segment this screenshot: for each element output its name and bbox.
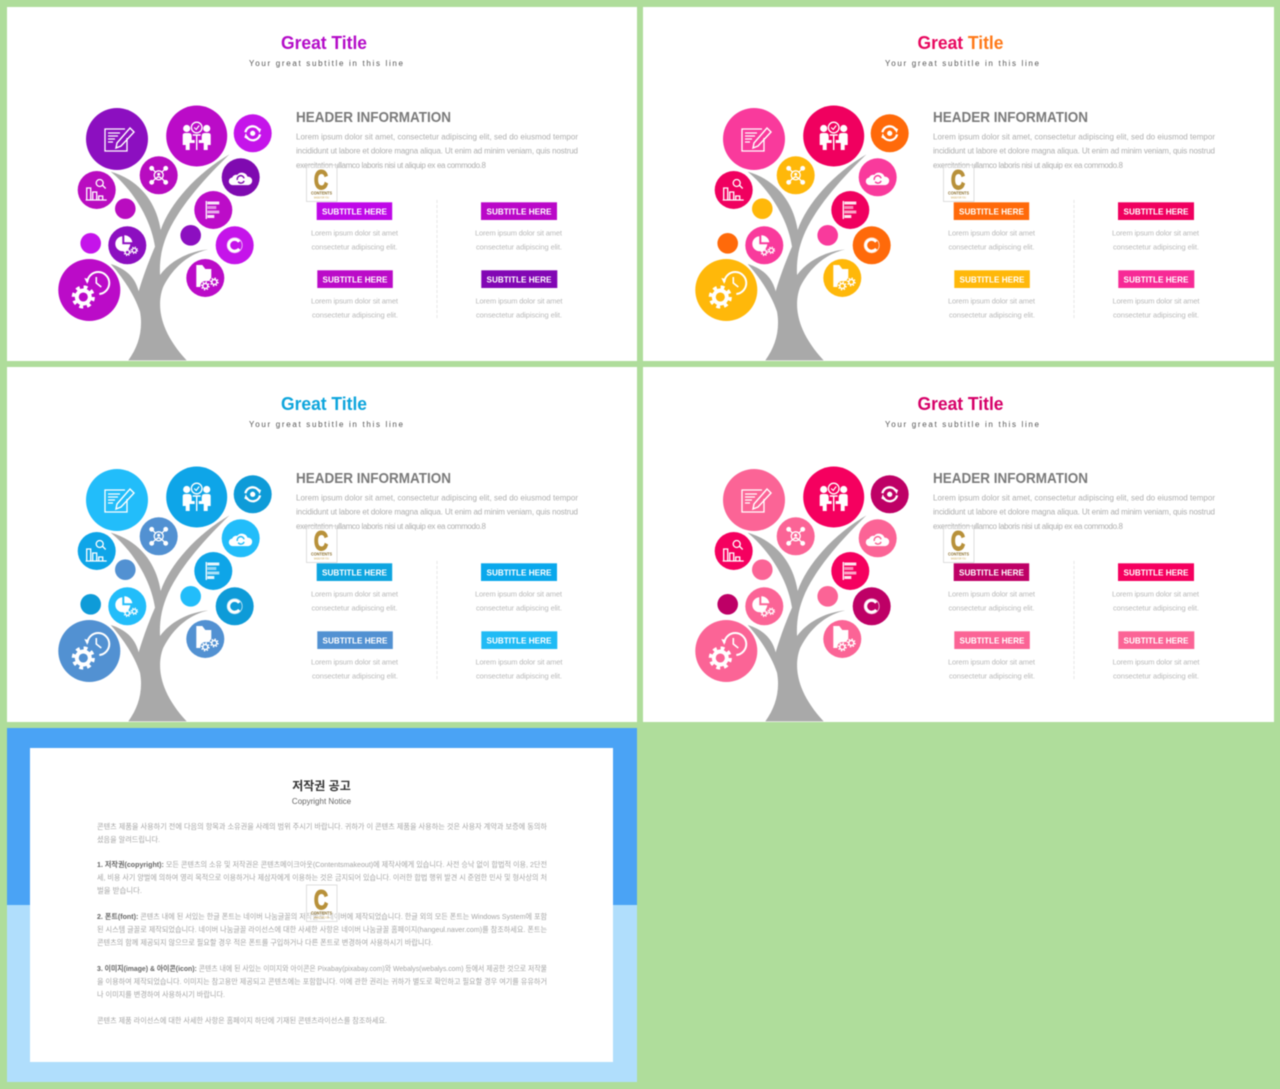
icon: rotate bbox=[234, 475, 272, 513]
block: bottom left bbox=[311, 631, 399, 680]
block: bottom right bbox=[1112, 631, 1200, 680]
block: top left: SUBTITLE HERE bbox=[322, 206, 387, 216]
block: top right: Lorem ipsum dolor sit amet bbox=[1112, 228, 1200, 238]
panel: rose tree slide bbox=[643, 367, 1274, 722]
block: bottom right bbox=[476, 631, 563, 680]
icon: document bbox=[86, 108, 148, 170]
paragraph bbox=[296, 132, 578, 170]
notice title: 저작권 공고 bbox=[292, 778, 351, 793]
icon: document bbox=[86, 469, 148, 531]
block: top left: SUBTITLE HERE bbox=[959, 568, 1024, 578]
icon: team bbox=[803, 106, 864, 166]
block: top left: consectetur adipiscing elit. bbox=[948, 242, 1034, 252]
block: bottom left: consectetur adipiscing elit. bbox=[949, 672, 1035, 680]
tree icon circles bbox=[695, 106, 909, 321]
icon: network bbox=[140, 517, 178, 555]
block: bottom right: consectetur adipiscing elit. bbox=[476, 310, 562, 320]
paragraph bbox=[933, 132, 1215, 170]
notice intro: 콘텐츠 제품을 사용하기 전에 다음의 항목과 소유권을 사례의 범위 주시기 바랍니다. 귀하가 이 콘텐츠 제품을 사용하는 것은 사용자 계약과 보증에 동의하 bbox=[97, 821, 547, 831]
block: top left: Lorem ipsum dolor sit amet bbox=[948, 590, 1036, 598]
paragraph: Lorem ipsum dolor sit amet, consectetur adipiscing elit, sed do eiusmod tempor bbox=[933, 494, 1215, 502]
icon: pie bbox=[745, 587, 783, 625]
icon: gauge bbox=[853, 587, 891, 625]
icon: pie bbox=[108, 587, 146, 625]
block: bottom left bbox=[948, 270, 1036, 320]
icon: team bbox=[166, 466, 227, 528]
icon: rotate bbox=[871, 114, 909, 152]
notice closing line: 콘텐츠 제품 라이선스에 대한 사세한 사항은 홈페이지 하단에 기재된 콘텐츠라이선스를 참조하세요. bbox=[97, 1015, 387, 1025]
block: bottom right: SUBTITLE HERE bbox=[486, 636, 552, 646]
icon: bars bbox=[194, 191, 232, 229]
notice section 1: 1. 저작권(copyright): 모든 콘텐츠의 소유 및 저작권은 콘텐츠메이크아웃(Contentsmakeout)에 제작사에게 있습니다. 사전 승낙 없이 합법적 이용, 2단전 bbox=[97, 859, 547, 869]
block: bottom left: Lorem ipsum dolor sit amet bbox=[311, 296, 399, 306]
icon: gear clock bbox=[58, 620, 120, 682]
icon: chart search bbox=[715, 532, 753, 570]
small circle bbox=[752, 559, 773, 580]
icon: cloud bbox=[859, 158, 897, 196]
panel: blue tree slide bbox=[7, 367, 637, 722]
block: bottom left: SUBTITLE HERE bbox=[960, 274, 1025, 284]
subtitle: Your great subtitle in this line bbox=[885, 420, 1040, 429]
block: top right: SUBTITLE HERE bbox=[486, 568, 552, 578]
tree trunk bbox=[111, 154, 229, 360]
icon: cloud bbox=[222, 519, 260, 557]
small circle bbox=[717, 594, 738, 615]
paragraph: Lorem ipsum dolor sit amet, consectetur adipiscing elit, sed do eiusmod tempor bbox=[933, 132, 1215, 142]
paragraph: incididunt ut labore et dolore magna aliqua. Ut enim ad minim veniam, quis nostrud bbox=[933, 508, 1215, 516]
icon: network bbox=[777, 517, 815, 555]
small circle bbox=[180, 586, 201, 607]
icon: cloud bbox=[859, 519, 897, 557]
small circle bbox=[817, 586, 838, 607]
paragraph: Lorem ipsum dolor sit amet, consectetur adipiscing elit, sed do eiusmod tempor bbox=[296, 494, 578, 502]
block: bottom left: consectetur adipiscing elit. bbox=[312, 672, 398, 680]
header: HEADER INFORMATION bbox=[933, 470, 1088, 487]
watermark logo bbox=[306, 526, 337, 562]
title: Great Title bbox=[281, 33, 367, 53]
block: bottom left: SUBTITLE HERE bbox=[322, 636, 388, 646]
block: top left: Lorem ipsum dolor sit amet bbox=[311, 590, 399, 598]
title: Great Title bbox=[918, 394, 1004, 414]
block: bottom right: consectetur adipiscing elit. bbox=[476, 672, 562, 680]
icon: bars bbox=[831, 552, 869, 590]
icon: bars bbox=[831, 191, 869, 229]
title: Great Title bbox=[281, 394, 367, 414]
notice section 1 bbox=[97, 859, 547, 895]
watermark logo bbox=[306, 165, 337, 202]
block: bottom left: SUBTITLE HERE bbox=[322, 274, 388, 284]
icon: pie bbox=[745, 226, 783, 264]
block: bottom right: SUBTITLE HERE bbox=[1124, 274, 1189, 284]
title: Great Title bbox=[918, 33, 1004, 53]
subtitle: Your great subtitle in this line bbox=[249, 420, 404, 429]
block: top left: consectetur adipiscing elit. bbox=[312, 604, 398, 612]
block: bottom left: Lorem ipsum dolor sit amet bbox=[311, 658, 399, 666]
watermark logo bbox=[944, 165, 974, 202]
panel: copyright notice bbox=[7, 728, 637, 1082]
notice section 2 bbox=[97, 911, 547, 947]
block: top right: consectetur adipiscing elit. bbox=[476, 242, 562, 252]
small circle bbox=[80, 233, 101, 254]
block: top left: SUBTITLE HERE bbox=[322, 568, 387, 578]
icon: folder bbox=[186, 259, 224, 297]
block: top right bbox=[1112, 563, 1200, 612]
notice section 1: 벌을 받습니다. bbox=[97, 885, 142, 895]
notice section 1: 세, 비용 사기 양벌에 의하여 영리 목적으로 이용하거나 제삼자에게 이용하는 것은 금지되어 있습니다. 이러한 합법 행위 발견 시 준엄한 민사 및 형사상의 처 bbox=[97, 872, 547, 882]
small circle bbox=[752, 198, 773, 219]
header: HEADER INFORMATION bbox=[296, 470, 451, 487]
tree icon circles bbox=[695, 466, 909, 682]
small circle bbox=[717, 233, 738, 254]
notice section 2: 된 시스템 글꼴로 제작되었습니다. 네이버 나눔글꼴 라이선스에 대한 사세한 사항은 네이버 나눔글꼴 홈페이지(hangeul.naver.com)를 참조하세요. 폰트는 bbox=[97, 924, 547, 934]
block: top left: SUBTITLE HERE bbox=[959, 206, 1024, 216]
small circle bbox=[80, 594, 101, 615]
block: top left bbox=[948, 563, 1036, 612]
icon: gauge bbox=[216, 587, 254, 625]
block: top right: Lorem ipsum dolor sit amet bbox=[475, 228, 563, 238]
icon: folder bbox=[186, 620, 224, 658]
icon: rotate bbox=[234, 114, 272, 152]
icon: rotate bbox=[871, 475, 909, 513]
block: bottom left bbox=[948, 631, 1036, 680]
paragraph: exercitation ullamco laboris nisi ut aliquip ex ea commodo.8 bbox=[296, 161, 487, 170]
icon: document bbox=[723, 108, 785, 170]
panel: purple tree slide bbox=[7, 7, 637, 361]
block: top left: Lorem ipsum dolor sit amet bbox=[311, 228, 399, 238]
block: top right bbox=[475, 202, 563, 252]
block: top right: consectetur adipiscing elit. bbox=[476, 604, 562, 612]
block: bottom right: SUBTITLE HERE bbox=[486, 274, 552, 284]
block: bottom right: Lorem ipsum dolor sit amet bbox=[1112, 296, 1200, 306]
small circle bbox=[180, 225, 201, 246]
paragraph: exercitation ullamco laboris nisi ut aliquip ex ea commodo.8 bbox=[933, 161, 1124, 170]
notice section 2: 2. 폰트(font): 콘텐츠 내에 된 서있는 한글 폰트는 네이버 나눔글꼴의 저작물로 네이버에 제작되었습니다. 한글 외의 모든 폰트는 Windows System에 포함 bbox=[97, 911, 547, 921]
block: bottom right: Lorem ipsum dolor sit amet bbox=[476, 658, 563, 666]
block: top left: Lorem ipsum dolor sit amet bbox=[948, 228, 1036, 238]
icon: chart search bbox=[78, 171, 116, 209]
block: bottom left: consectetur adipiscing elit. bbox=[312, 310, 398, 320]
block: bottom right: Lorem ipsum dolor sit amet bbox=[1112, 658, 1200, 666]
block: top right: SUBTITLE HERE bbox=[486, 206, 552, 216]
small circle bbox=[817, 225, 838, 246]
icon: cloud bbox=[222, 158, 260, 196]
subtitle: Your great subtitle in this line bbox=[249, 59, 404, 68]
tree icon circles bbox=[58, 106, 272, 321]
tree icon circles bbox=[58, 466, 272, 682]
icon: folder bbox=[823, 259, 861, 297]
block: top right: Lorem ipsum dolor sit amet bbox=[475, 590, 563, 598]
paragraph: exercitation ullamco laboris nisi ut aliquip ex ea commodo.8 bbox=[296, 522, 487, 531]
block: top left: consectetur adipiscing elit. bbox=[948, 604, 1034, 612]
notice section 3: 3. 이미지(image) & 아이콘(icon): 콘텐츠 내에 된 사있는 이미지와 아이콘은 Pixabay(pixabay.com)와 Webalys(webalys.com) 등에서 제공한 것으로 저작물 bbox=[97, 963, 547, 973]
icon: folder bbox=[823, 620, 861, 658]
tree trunk bbox=[748, 154, 866, 360]
icon: network bbox=[140, 156, 178, 194]
watermark logo bbox=[944, 526, 974, 562]
block: bottom right: Lorem ipsum dolor sit amet bbox=[476, 296, 563, 306]
paragraph: incididunt ut labore et dolore magna aliqua. Ut enim ad minim veniam, quis nostrud bbox=[933, 146, 1215, 156]
header: HEADER INFORMATION bbox=[296, 109, 451, 126]
block: top left: consectetur adipiscing elit. bbox=[312, 242, 398, 252]
block: bottom right bbox=[476, 270, 563, 320]
icon: document bbox=[723, 469, 785, 531]
block: bottom left: SUBTITLE HERE bbox=[960, 636, 1025, 646]
subtitle: Your great subtitle in this line bbox=[885, 59, 1040, 68]
block: top right: consectetur adipiscing elit. bbox=[1113, 604, 1199, 612]
panel: pink orange tree slide bbox=[643, 7, 1274, 361]
block: bottom left bbox=[311, 270, 399, 320]
icon: network bbox=[777, 156, 815, 194]
icon: bars bbox=[194, 552, 232, 590]
block: top right bbox=[1112, 202, 1200, 252]
block: bottom left: consectetur adipiscing elit. bbox=[949, 310, 1035, 320]
small circle bbox=[115, 198, 136, 219]
block: bottom right: consectetur adipiscing elit. bbox=[1113, 672, 1199, 680]
block: top left bbox=[948, 202, 1036, 252]
icon: chart search bbox=[78, 532, 116, 570]
icon: team bbox=[803, 466, 864, 528]
paragraph bbox=[933, 494, 1215, 531]
block: top left bbox=[311, 563, 399, 612]
block: top left bbox=[311, 202, 399, 252]
block: bottom left: Lorem ipsum dolor sit amet bbox=[948, 658, 1036, 666]
header: HEADER INFORMATION bbox=[933, 109, 1088, 126]
paragraph: incididunt ut labore et dolore magna aliqua. Ut enim ad minim veniam, quis nostrud bbox=[296, 508, 578, 516]
tree trunk bbox=[111, 515, 229, 721]
block: bottom left: Lorem ipsum dolor sit amet bbox=[948, 296, 1036, 306]
icon: gauge bbox=[853, 226, 891, 264]
block: top right bbox=[475, 563, 563, 612]
block: top right: consectetur adipiscing elit. bbox=[1113, 242, 1199, 252]
icon: gear clock bbox=[695, 620, 757, 682]
block: top right: Lorem ipsum dolor sit amet bbox=[1112, 590, 1200, 598]
notice section 3: 을 이용하여 제작되었습니다. 이미지는 참고용만 제공되고 콘텐츠에는 포함합니다. 이에 관한 권리는 귀하가 별도로 확인하고 필요할 경우 여기를 유유하거 bbox=[97, 976, 547, 986]
notice section 2: 콘텐츠의 함께 제공되지 않으므로 필요할 경우 적은 폰트를 구입하거나 다른 폰트로 변경하여 사용하시기 바랍니다. bbox=[97, 937, 433, 947]
icon: pie bbox=[108, 226, 146, 264]
block: bottom right bbox=[1112, 270, 1200, 320]
block: top right: SUBTITLE HERE bbox=[1124, 206, 1189, 216]
icon: team bbox=[166, 106, 227, 166]
paragraph bbox=[296, 494, 578, 531]
paragraph: incididunt ut labore et dolore magna aliqua. Ut enim ad minim veniam, quis nostrud bbox=[296, 146, 578, 156]
icon: chart search bbox=[715, 171, 753, 209]
icon: gauge bbox=[216, 226, 254, 264]
icon: gear clock bbox=[58, 259, 120, 321]
icon: gear clock bbox=[695, 259, 757, 321]
notice intro bbox=[97, 821, 547, 844]
notice section 3: 나 이미지를 변경하여 사용하시기 바랍니다. bbox=[97, 989, 225, 999]
notice subtitle: Copyright Notice bbox=[292, 797, 352, 806]
watermark logo bbox=[306, 885, 337, 922]
block: bottom right: consectetur adipiscing elit. bbox=[1113, 310, 1199, 320]
paragraph: exercitation ullamco laboris nisi ut aliquip ex ea commodo.8 bbox=[933, 522, 1124, 531]
block: bottom right: SUBTITLE HERE bbox=[1124, 636, 1189, 646]
small circle bbox=[115, 559, 136, 580]
block: top right: SUBTITLE HERE bbox=[1124, 568, 1189, 578]
paragraph: Lorem ipsum dolor sit amet, consectetur adipiscing elit, sed do eiusmod tempor bbox=[296, 132, 578, 142]
tree trunk bbox=[748, 515, 866, 721]
notice section 3 bbox=[97, 963, 547, 999]
notice intro: 셨음을 알려드립니다. bbox=[97, 834, 160, 844]
